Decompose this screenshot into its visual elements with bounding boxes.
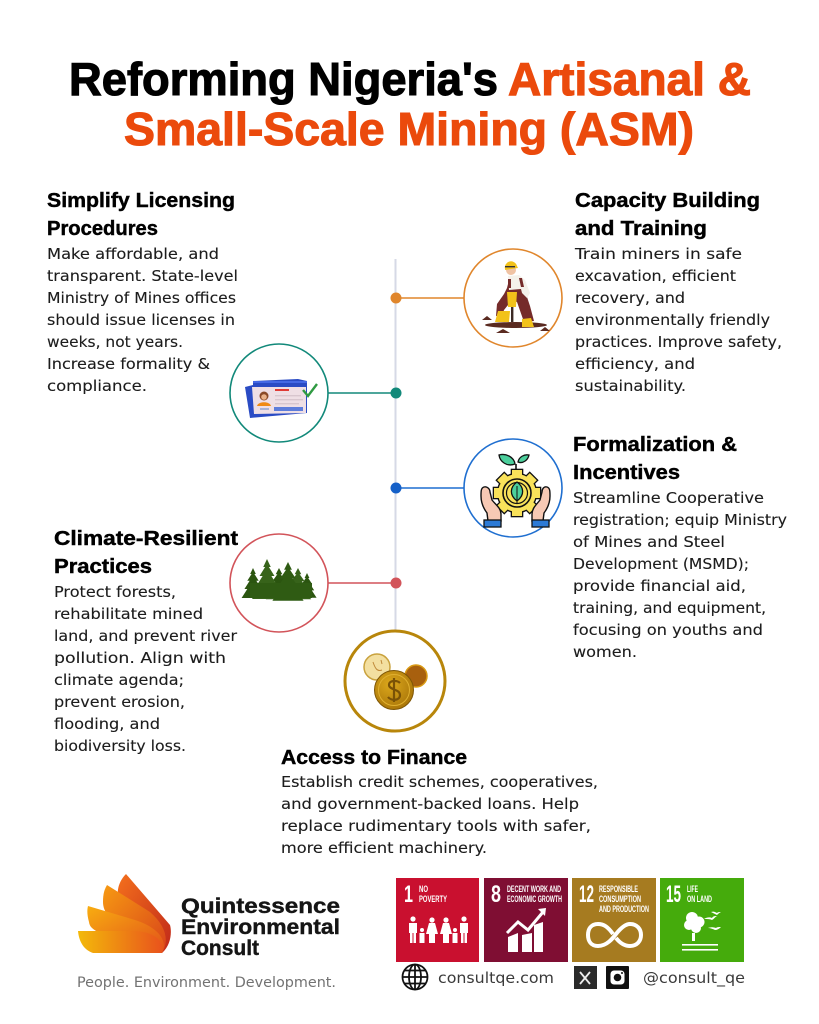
heading: simplify licensing: Procedures: [47, 217, 158, 240]
text: simplify licensing body: Ministry of Mines offices: [47, 289, 236, 307]
text: simplify licensing body: Make affordable, and: [47, 245, 219, 263]
text: climate-resilient body: [54, 583, 238, 755]
heading: simplify licensing: [47, 189, 235, 240]
SDG tile 8: decent work: DECENT WORK AND: [507, 884, 561, 895]
panel: formalization and incentives: [573, 433, 787, 661]
timeline spine: [394, 259, 396, 631]
logo wordmark: Quintessence: [181, 895, 340, 918]
heading: capacity building: and Training: [575, 217, 707, 240]
text: access to finance body: and government-backed loans. Help: [281, 795, 579, 813]
text: simplify licensing body: should issue licenses in: [47, 311, 235, 329]
logo: Quintessence flame mark: [78, 874, 171, 953]
social handle: @consult_qe: [643, 969, 745, 988]
text: access to finance body: [281, 773, 598, 857]
heading: simplify licensing: Simplify Licensing: [47, 189, 235, 212]
heading: formalization: Incentives: [573, 461, 680, 484]
SDG tile 1: no poverty: POVERTY: [419, 894, 447, 905]
text: climate-resilient body: prevent erosion,: [54, 693, 185, 711]
logo wordmark: [181, 895, 340, 960]
text: formalization body: training, and equipment,: [573, 599, 766, 617]
text: formalization body: registration; equip Ministry: [573, 511, 787, 529]
icon: X: [574, 966, 597, 989]
text: climate-resilient body: Protect forests,: [54, 583, 176, 601]
panel: access to finance: [281, 746, 598, 857]
text: formalization body: provide financial aid,: [573, 577, 746, 595]
icon: forest: [230, 534, 328, 632]
connector: orange: [390, 292, 464, 304]
connector: blue: [390, 482, 464, 494]
text: formalization body: Streamline Cooperative: [573, 489, 764, 507]
heading: climate-resilient: [54, 527, 238, 578]
connector: teal: [328, 388, 402, 398]
SDG tile 12: responsible consumption: RESPONSIBLE: [599, 884, 638, 895]
text: formalization body: of Mines and Steel: [573, 533, 725, 551]
SDG tile 12: responsible consumption: 12: [579, 881, 594, 908]
text: climate-resilient body: land, and prevent river: [54, 627, 238, 645]
SDG tile 1: no poverty: [396, 878, 479, 962]
text: climate-resilient body: flooding, and: [54, 715, 160, 733]
text: simplify licensing body: transparent. State-level: [47, 267, 238, 285]
SDG tile 15: life on land: ON LAND: [687, 894, 712, 905]
text: capacity building body: recovery, and: [575, 289, 685, 307]
text: capacity building body: practices. Improve safety,: [575, 333, 782, 351]
icon: licence card: [230, 344, 328, 442]
text: climate-resilient body: rehabilitate mined: [54, 605, 203, 623]
text: capacity building body: Train miners in safe: [574, 245, 742, 263]
text: access to finance body: replace rudimentary tools with safer,: [281, 817, 591, 835]
SDG tile 12: responsible consumption: [572, 878, 656, 962]
heading: climate-resilient: Climate-Resilient: [54, 527, 238, 550]
heading: climate-resilient: Practices: [54, 555, 152, 578]
SDG tile 8: decent work: ECONOMIC GROWTH: [507, 894, 562, 905]
panel: climate-resilient practices: [54, 527, 238, 755]
SDG tile 15: life on land: LIFE: [687, 884, 698, 895]
text: climate-resilient body: biodiversity loss.: [54, 737, 186, 755]
SDG tile 1: no poverty: 1: [404, 881, 413, 908]
text: formalization body: [573, 489, 787, 661]
SDG tile 12: responsible consumption: CONSUMPTION: [599, 894, 641, 905]
text: climate-resilient body: climate agenda;: [54, 671, 184, 689]
logo wordmark: Environmental: [181, 916, 340, 939]
SDG tile 8: decent work: [484, 878, 568, 962]
text: formalization body: Development (MSMD);: [573, 555, 749, 573]
text: simplify licensing body: Increase formality &: [47, 355, 210, 373]
heading: capacity building: [575, 189, 760, 240]
heading: formalization: Formalization &: [573, 433, 737, 456]
title: Artisanal &: [508, 53, 751, 105]
text: formalization body: women.: [573, 643, 637, 661]
text: simplify licensing body: weeks, not years.: [47, 333, 183, 351]
text: capacity building body: environmentally friendly: [575, 311, 770, 329]
text: formalization body: focusing on youths and: [573, 621, 763, 639]
text: capacity building body: [574, 245, 782, 395]
SDG tile 8: decent work: 8: [491, 881, 501, 908]
text: capacity building body: sustainability.: [575, 377, 686, 395]
text: climate-resilient body: pollution. Align with: [54, 649, 226, 667]
icon: gear in hands: [464, 439, 562, 537]
SDG tile 15: life on land: 15: [666, 881, 681, 908]
logo wordmark: Consult: [181, 937, 259, 960]
SDG tile 1: no poverty: NO: [419, 884, 428, 895]
heading: capacity building: Capacity Building: [575, 189, 760, 212]
title: Reforming Nigeria's: [69, 53, 498, 105]
tagline: People. Environment. Development.: [77, 975, 336, 991]
SDG tile 15: life on land: [660, 878, 744, 962]
icon: globe: [402, 964, 428, 990]
text: access to finance body: Establish credit schemes, cooperatives,: [281, 773, 598, 791]
panel: simplify licensing procedures: [47, 189, 238, 395]
icon: Instagram: [606, 966, 629, 989]
heading: access to finance: Access to Finance: [281, 746, 467, 769]
title: [69, 53, 751, 155]
text: access to finance body: more efficient machinery.: [281, 839, 487, 857]
SDG tile 12: responsible consumption: AND PRODUCTION: [599, 904, 649, 915]
text: simplify licensing body: [47, 245, 238, 395]
panel: capacity building and training: [574, 189, 782, 395]
heading: formalization: [573, 433, 737, 484]
website: consultqe.com: [438, 969, 554, 987]
icon: miner with jackhammer: [464, 249, 562, 347]
text: simplify licensing body: compliance.: [47, 377, 147, 395]
text: capacity building body: efficiency, and: [575, 355, 695, 373]
connector: red: [328, 578, 402, 588]
icon: gold coins: [345, 631, 445, 731]
title: Small-Scale Mining (ASM): [124, 103, 694, 155]
text: capacity building body: excavation, efficient: [575, 267, 736, 285]
